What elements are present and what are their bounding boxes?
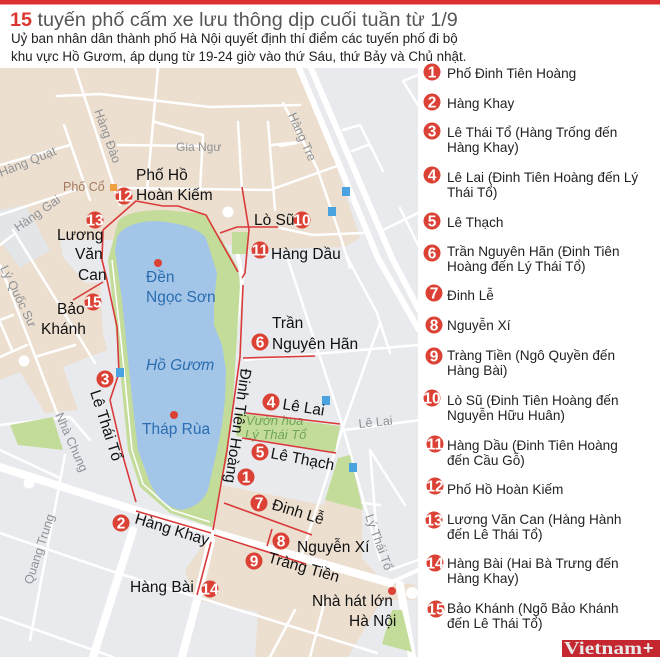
black street labels: Lò Sũ xyxy=(254,212,295,229)
grey map labels: Hàng Gai xyxy=(12,193,63,234)
landmark dots xyxy=(154,259,396,595)
legend markers: 9 xyxy=(430,348,439,366)
black street labels: Bảo xyxy=(57,301,85,318)
panel: numbered street legend xyxy=(418,64,660,660)
tan district south xyxy=(185,485,415,657)
grey map labels: Nhà Chung xyxy=(52,411,91,474)
numbered map markers: 2 xyxy=(117,516,125,532)
legend markers: 4 xyxy=(428,168,437,184)
legend text: Lê Thái Tổ (Hàng Trống đến xyxy=(447,125,617,140)
legend text: Lê Thạch xyxy=(447,215,503,230)
blue lake labels: Hồ Gươm xyxy=(146,357,214,374)
black street labels: Khánh xyxy=(41,321,86,338)
black street labels: Lê Lai xyxy=(281,396,326,420)
park opera xyxy=(382,610,412,652)
legend text: Trần Nguyên Hãn (Đinh Tiên xyxy=(447,244,620,259)
legend text xyxy=(447,66,638,631)
top red bar xyxy=(0,0,660,4)
black street labels: Can xyxy=(78,267,106,284)
intro text: Uỷ ban nhân dân thành phố Hà Nội quyết định thí điểm các tuyến phố đi bộ xyxy=(11,31,458,46)
legend text: đến Lê Thái Tổ) xyxy=(447,616,542,631)
legend markers: 8 xyxy=(430,318,439,334)
numbered map markers: 12 xyxy=(115,188,133,206)
legend text: Thái Tổ) xyxy=(447,185,497,200)
legend text: Hàng Khay) xyxy=(447,571,519,586)
legend text: Lương Văn Can (Hàng Hành xyxy=(447,512,621,527)
numbered map markers: 3 xyxy=(101,372,110,388)
grey block xyxy=(0,205,50,268)
black street labels xyxy=(41,167,396,630)
title: 15 tuyến phố cấm xe lưu thông dịp cuối tuần từ 1/9 xyxy=(10,9,458,31)
panel: map xyxy=(0,68,420,657)
road network xyxy=(0,68,420,657)
legend text: Hàng Khay) xyxy=(447,140,519,155)
numbered map markers: 15 xyxy=(84,294,102,312)
black street labels: Hoàn Kiếm xyxy=(136,187,213,204)
legend markers: 6 xyxy=(428,246,437,262)
black street labels: Hàng Khay xyxy=(133,511,211,549)
legend markers: 2 xyxy=(428,94,436,112)
legend markers xyxy=(423,64,445,618)
legend text: Hàng Bài) xyxy=(447,363,507,378)
legend markers: 3 xyxy=(428,124,437,140)
legend text: Nguyễn Hữu Huân) xyxy=(447,408,565,423)
legend text: đến Cầu Gỗ) xyxy=(447,453,525,468)
legend markers: 11 xyxy=(427,436,444,454)
legend markers: 15 xyxy=(427,602,445,618)
legend text: Hoàng đến Lý Thái Tổ) xyxy=(447,259,586,274)
black street labels: Đinh Lễ xyxy=(270,497,326,528)
numbered map markers: 13 xyxy=(86,212,104,230)
park: Vườn hoa Lý Thái Tổ xyxy=(236,413,340,452)
legend markers: 12 xyxy=(426,478,444,496)
black street labels: Nhà hát lớn xyxy=(312,593,393,610)
lake: Hồ Gươm xyxy=(115,221,226,510)
numbered map markers: 10 xyxy=(293,212,311,230)
black street labels: Hà Nội xyxy=(349,613,396,630)
numbered map markers: 9 xyxy=(250,554,259,570)
legend markers: 13 xyxy=(425,512,443,530)
legend text: Nguyễn Xí xyxy=(447,318,511,333)
black street labels: Nguyên Hãn xyxy=(272,336,358,353)
black street labels: Hàng Dầu xyxy=(271,246,341,263)
legend text: Lò Sũ (Đinh Tiên Hoàng đến xyxy=(447,393,619,408)
numbered map markers: 8 xyxy=(277,534,286,550)
black street labels: Lương xyxy=(57,227,103,244)
gardens near Hàng Dầu xyxy=(232,232,248,254)
legend text: Hàng Bài (Hai Bà Trưng đến xyxy=(447,556,619,571)
grey map labels: Vườn hoa xyxy=(246,413,303,428)
grey map labels: Lý Thái Tổ xyxy=(362,512,395,572)
legend markers: 5 xyxy=(428,214,437,230)
legend text: đến Lê Thái Tổ) xyxy=(447,527,542,542)
legend text: Tràng Tiền (Ngô Quyền đến xyxy=(447,348,615,363)
legend text: Bảo Khánh (Ngõ Bảo Khánh xyxy=(447,601,619,616)
legend markers: 14 xyxy=(426,556,444,572)
grey map labels: Phố Cổ xyxy=(63,180,105,194)
black street labels: Tràng Tiền xyxy=(266,550,341,586)
intro text: khu vực Hồ Gươm, áp dụng từ 19-24 giờ vào thứ Sáu, thứ Bảy và Chủ nhật. xyxy=(11,49,466,64)
numbered map markers: 4 xyxy=(267,394,276,412)
legend text: Hàng Khay xyxy=(447,96,514,111)
blue lake labels xyxy=(142,269,216,438)
black street labels: Phố Hồ xyxy=(136,167,188,184)
black street labels: Lê Thạch xyxy=(269,445,336,474)
blue lake labels: Đền xyxy=(146,269,174,286)
grey map labels xyxy=(0,107,395,586)
black street labels: Đinh Tiên Hoàng xyxy=(221,367,254,484)
grey map labels: Gia Ngư xyxy=(176,140,221,154)
grey map labels: Hàng Đào xyxy=(91,107,124,165)
black street labels: Nguyễn Xí xyxy=(297,539,370,556)
blue lake labels: Ngọc Sơn xyxy=(146,289,216,306)
grey map labels: Quang Trung xyxy=(22,512,57,586)
legend text: Lê Lai (Đinh Tiên Hoàng đến Lý xyxy=(447,170,638,185)
numbered map markers: 7 xyxy=(255,496,263,512)
black street labels: Hàng Bài xyxy=(130,579,194,596)
tan district north xyxy=(0,68,360,413)
logo: Vietnam+ xyxy=(562,638,660,658)
black street labels: Lê Thái Tổ xyxy=(86,388,125,463)
legend text: Hàng Dầu (Đinh Tiên Hoàng xyxy=(447,438,618,453)
black street labels: Trần xyxy=(272,315,303,332)
numbered map markers: 14 xyxy=(201,582,219,598)
park west xyxy=(10,417,63,450)
logo: Vietnam+: + xyxy=(643,638,654,658)
numbered map markers: 5 xyxy=(256,444,265,462)
legend markers: 7 xyxy=(430,286,438,302)
legend markers: 1 xyxy=(428,64,437,82)
numbered map markers: 1 xyxy=(242,470,251,486)
map icons xyxy=(18,184,418,599)
blue lake labels: Tháp Rùa xyxy=(142,421,210,438)
legend text: Phố Hồ Hoàn Kiếm xyxy=(447,482,563,497)
intro text xyxy=(11,31,466,64)
legend text: Phố Đinh Tiên Hoàng xyxy=(447,66,576,81)
legend markers: 10 xyxy=(423,390,441,408)
legend text: Đinh Lễ xyxy=(447,288,494,303)
park south east xyxy=(325,455,363,510)
logo: Vietnam+: Vietnam xyxy=(564,638,642,658)
grey map labels: Lê Lai xyxy=(358,413,393,431)
grey map labels: Hàng Tre xyxy=(285,111,319,163)
black street labels: Văn xyxy=(75,246,103,263)
park around lake xyxy=(108,210,240,527)
grey pocket by Lương Văn Can xyxy=(60,240,103,283)
closed street lines xyxy=(73,187,340,595)
numbered map markers xyxy=(84,188,311,598)
grey map labels: Lý Thái Tổ xyxy=(245,427,307,442)
lake path xyxy=(112,260,210,522)
numbered map markers: 11 xyxy=(252,242,269,260)
numbered map markers: 6 xyxy=(256,334,265,352)
